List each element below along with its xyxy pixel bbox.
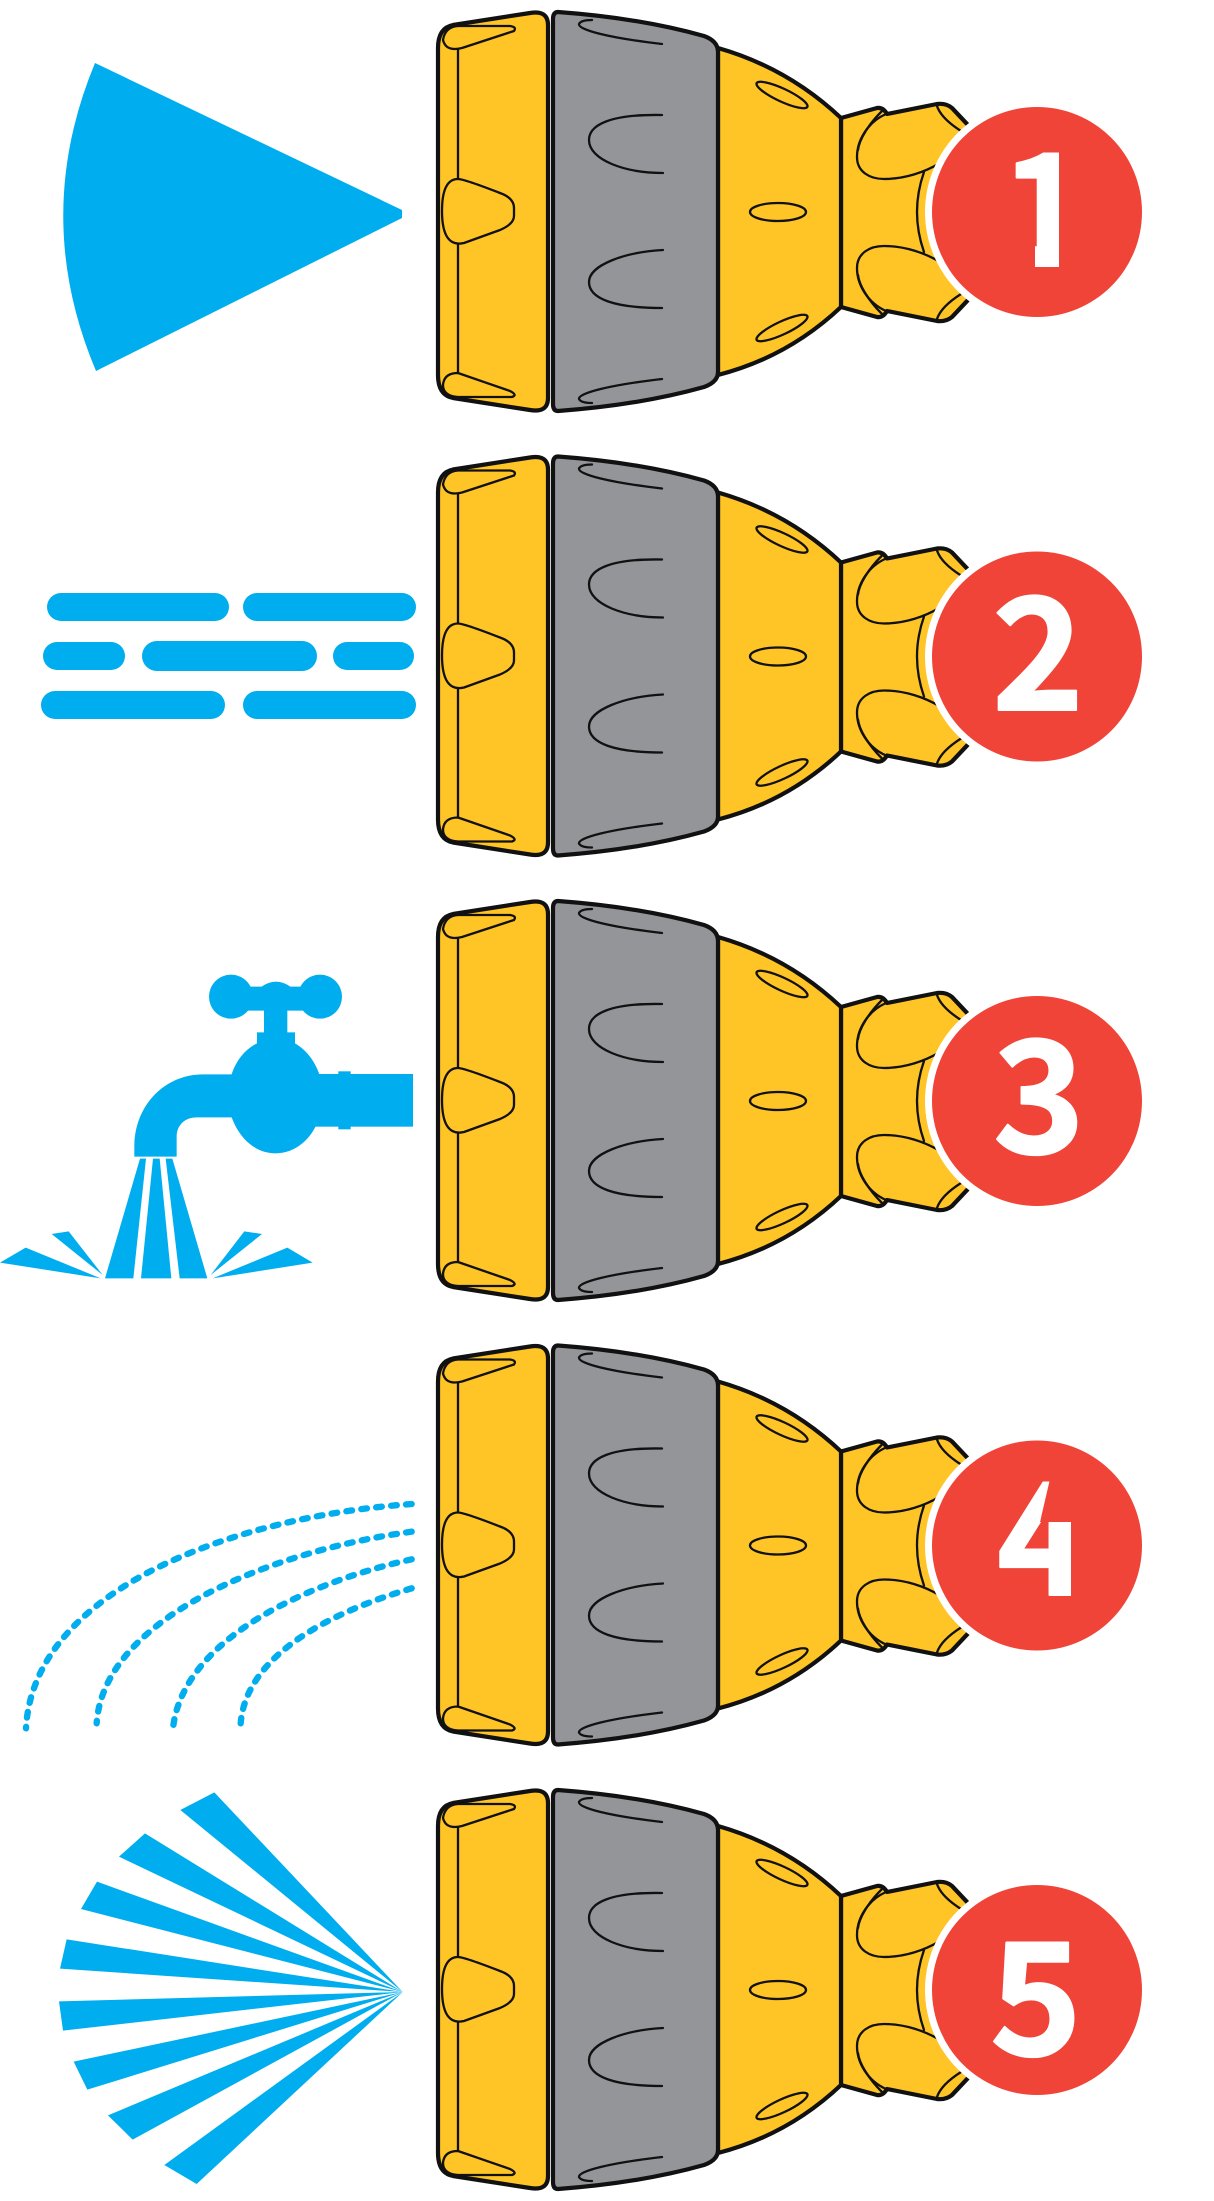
- row 2: shower spray: [41, 456, 1149, 856]
- nozzle 5: [438, 1790, 968, 2189]
- row 3: tap flow: [0, 901, 1149, 1300]
- badge 4: 4: [997, 1414, 1089, 1640]
- icon: water tap with splash: [0, 975, 413, 1278]
- nozzle 1: [438, 12, 968, 411]
- row 5: fan spray: [59, 1790, 1149, 2189]
- nozzle 4: [438, 1346, 968, 1744]
- row 4: mist arcs: [26, 1346, 1149, 1744]
- icon: dotted water arcs: [26, 1504, 412, 1732]
- badge 5: [925, 1874, 1149, 2102]
- badge 2: 2: [992, 529, 1084, 755]
- badge 3: 3: [993, 972, 1085, 1198]
- icon: radiating fan rays: [59, 1792, 403, 2184]
- icon: horizontal broken streams: [41, 593, 416, 719]
- row 1: jet spray: [63, 12, 1149, 411]
- icon: solid cone spray: [63, 63, 402, 371]
- badge 5: 5: [990, 1874, 1082, 2100]
- badge 2: [925, 529, 1149, 768]
- badge 3: [925, 972, 1149, 1213]
- badge 1: [925, 107, 1142, 317]
- badge 4: [925, 1440, 1142, 1650]
- nozzle 3: [438, 901, 968, 1300]
- nozzle 2: [438, 456, 968, 856]
- badge 1: 1: [1000, 85, 1092, 311]
